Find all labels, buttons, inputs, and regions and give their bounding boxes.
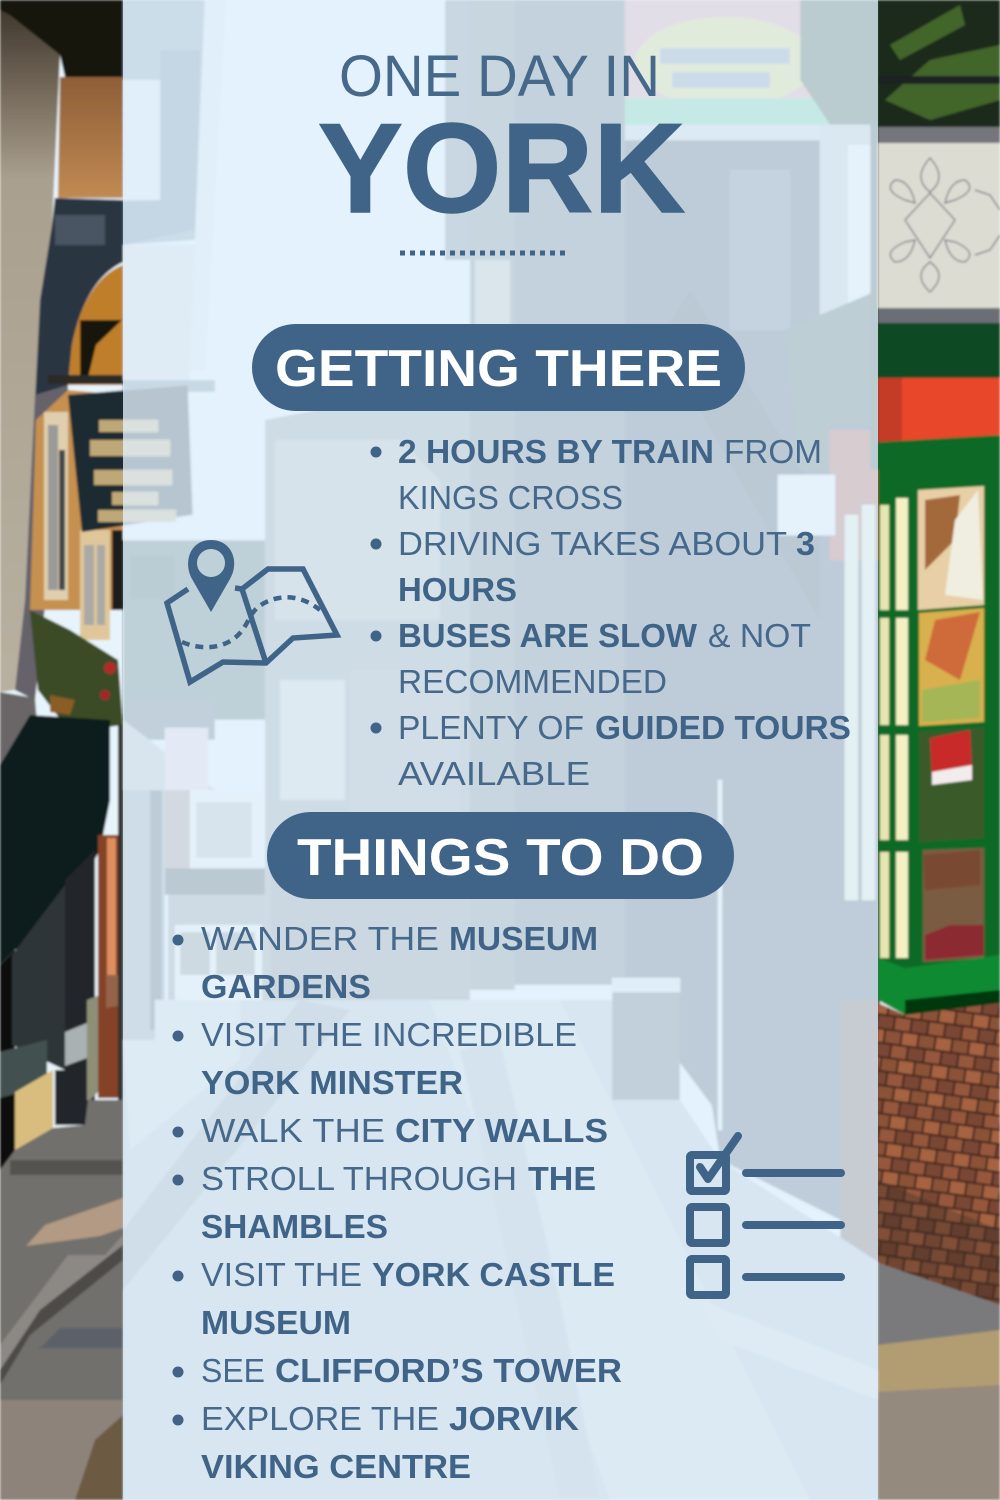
shop front: [878, 323, 1000, 378]
title line: one day in: ONE DAY IN: [339, 44, 660, 109]
title line: york: YORK: [318, 97, 685, 239]
list: getting there: FROM: [724, 433, 822, 470]
list: getting there: 2 HOURS BY TRAIN: [398, 433, 714, 470]
right top greenery: [878, 0, 1000, 130]
centre scene: left buildings: [123, 540, 285, 720]
list: things to do: CITY WALLS: [395, 1112, 608, 1149]
faded shop window: [845, 505, 875, 960]
list: things to do: VIKING CENTRE: [201, 1448, 471, 1485]
list: things to do: MUSEUM: [449, 920, 598, 957]
greenery: [30, 610, 123, 732]
list: getting there: GUIDED TOURS: [595, 709, 851, 746]
list: things to do: YORK MINSTER: [201, 1064, 463, 1101]
list: getting there: & NOT: [708, 617, 811, 654]
list: getting there: PLENTY OF: [398, 709, 584, 746]
list: getting there: KINGS CROSS: [398, 479, 623, 516]
list: things to do: STROLL THROUGH: [201, 1160, 517, 1197]
list: things to do: SHAMBLES: [201, 1208, 388, 1245]
list: things to do: WANDER THE: [201, 920, 439, 957]
list: getting there: [370, 433, 851, 792]
dark ground floor: [0, 715, 110, 965]
right pavement: [878, 1263, 1000, 1500]
list: things to do: EXPLORE THE: [201, 1400, 439, 1437]
list: things to do: YORK CASTLE: [372, 1256, 615, 1293]
list: things to do: THE: [528, 1160, 596, 1197]
list: getting there: AVAILABLE: [398, 755, 590, 792]
street: [123, 1000, 878, 1500]
list: getting there: DRIVING TAKES ABOUT: [398, 525, 787, 562]
shop wall and windows: [30, 390, 123, 610]
therapy rooms sign: [878, 127, 1000, 145]
building behind panel, upper left: [123, 0, 205, 245]
list: things to do: SEE: [201, 1352, 265, 1389]
list: things to do: VISIT THE INCREDIBLE: [201, 1016, 577, 1053]
list: getting there: RECOMMENDED: [398, 663, 667, 700]
section heading: things to do: THINGS TO DO: [297, 829, 704, 887]
chocolate shop sign: [68, 385, 193, 532]
translucent text panel: [123, 0, 878, 1500]
icon: checklist: [690, 1136, 841, 1295]
list: getting there: BUSES ARE SLOW: [398, 617, 698, 654]
list: getting there: HOURS: [398, 571, 517, 608]
list: things to do: MUSEUM: [201, 1304, 351, 1341]
section heading: things to do: [267, 812, 734, 899]
list: things to do: WALK THE: [201, 1112, 385, 1149]
section heading: getting there: GETTING THERE: [275, 340, 722, 398]
brick wall: [878, 1003, 1000, 1305]
right side building continuation: [680, 900, 880, 1240]
title: [318, 44, 685, 239]
list: getting there: 3: [796, 525, 815, 562]
left pavement: [0, 1100, 123, 1500]
section heading: getting there: [252, 324, 745, 411]
left wall: [0, 8, 60, 692]
stone corner at foot of wall: [0, 692, 38, 765]
dotted divider: [400, 250, 565, 256]
top advert sign: [625, 0, 835, 125]
list: things to do: [172, 920, 622, 1485]
list: things to do: JORVIK: [449, 1400, 579, 1437]
list: things to do: GARDENS: [201, 968, 371, 1005]
centre scene: middle buildings: [265, 380, 470, 990]
list: things to do: CLIFFORD’S TOWER: [275, 1352, 622, 1389]
list: things to do: VISIT THE: [201, 1256, 362, 1293]
icon: map with location pin: [167, 540, 337, 682]
shop window panes: [918, 486, 984, 610]
